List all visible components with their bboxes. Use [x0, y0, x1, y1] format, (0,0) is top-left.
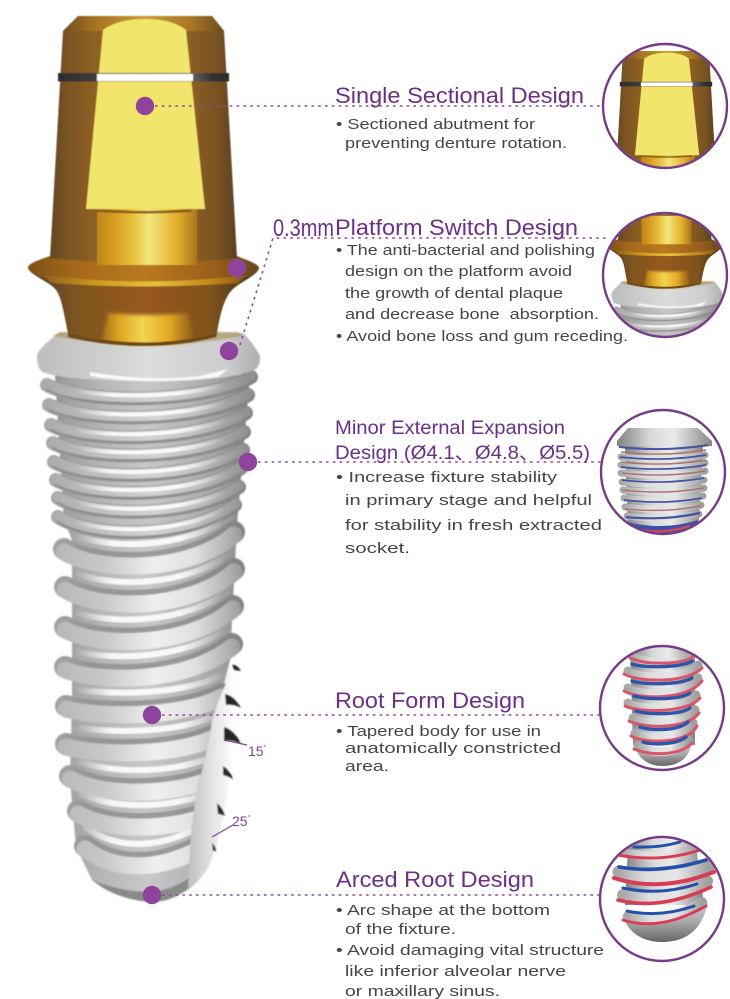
section: single sectional design	[335, 83, 584, 152]
heading: Single Sectional Design	[335, 83, 584, 108]
description: in primary stage and helpful	[345, 492, 592, 509]
heading: Arced Root Design	[336, 867, 534, 892]
description: • Sectioned abutment for	[336, 116, 535, 133]
heading: Platform Switch Design	[335, 215, 578, 240]
gold collar highlight	[97, 209, 197, 265]
description: of the fixture.	[345, 921, 456, 938]
circle detail: external expansion threads	[601, 410, 725, 536]
description: the growth of dental plaque	[345, 285, 563, 302]
angle marker: 25 degrees	[212, 813, 251, 837]
description: for stability in fresh extracted	[345, 517, 602, 534]
description: and decrease bone absorption.	[345, 306, 599, 323]
description: • The anti-bacterial and polishing	[336, 242, 595, 259]
callout dots	[136, 97, 257, 904]
description: socket.	[345, 540, 410, 557]
description: preventing denture rotation.	[345, 135, 567, 152]
dimension label: 0.3mm	[273, 215, 334, 242]
section: arced root design	[336, 867, 604, 999]
yellow flat	[86, 19, 205, 209]
angle marker: 25 degrees: 25	[232, 813, 248, 829]
tight upper threads	[47, 374, 251, 537]
heading: Minor External Expansion	[335, 418, 565, 439]
wide lower threads	[64, 513, 234, 866]
leader lines	[155, 106, 608, 895]
band	[58, 73, 229, 82]
section: root form design	[335, 688, 561, 775]
cutting groove	[184, 660, 239, 892]
neck and flange base	[28, 256, 259, 342]
description: • Increase fixture stability	[336, 469, 558, 486]
implant illustration	[28, 16, 260, 902]
description	[336, 902, 604, 999]
description: design on the platform avoid	[345, 263, 572, 280]
circle detail: platform switch	[602, 212, 728, 338]
description: • Tapered body for use in	[336, 723, 541, 740]
angle marker: 25 degrees: °	[248, 814, 251, 822]
description: like inferior alveolar nerve	[345, 963, 566, 980]
description: • Arc shape at the bottom	[336, 902, 550, 919]
circle detail: arced root	[600, 837, 724, 961]
heading: Root Form Design	[335, 688, 525, 713]
description	[336, 469, 602, 557]
angle marker: 15 degrees: °	[264, 744, 267, 752]
fixture: threaded silver implant body	[37, 332, 260, 902]
heading: Design (Ø4.1、Ø4.8、Ø5.5)	[335, 443, 590, 464]
collar platform	[37, 333, 260, 381]
description: area.	[345, 758, 389, 775]
description	[336, 116, 567, 152]
angle marker: 15 degrees: 15	[248, 743, 264, 759]
heading	[335, 418, 590, 464]
flange	[28, 256, 259, 284]
rounded tip	[92, 878, 189, 902]
description: anatomically constricted	[345, 740, 561, 757]
description: • Avoid bone loss and gum receding.	[336, 328, 628, 345]
angle marker: 15 degrees	[224, 740, 267, 759]
section: platform switch design	[273, 215, 628, 345]
circle detail: sectioned abutment	[602, 42, 728, 170]
cutting edge teeth	[212, 665, 241, 852]
circle detail: root form	[600, 646, 724, 770]
description	[336, 242, 628, 345]
description: • Avoid damaging vital structure	[336, 942, 604, 959]
abutment: gold upper part	[28, 16, 259, 346]
section: minor external expansion design	[335, 418, 602, 557]
description	[336, 723, 561, 775]
body	[50, 16, 237, 263]
